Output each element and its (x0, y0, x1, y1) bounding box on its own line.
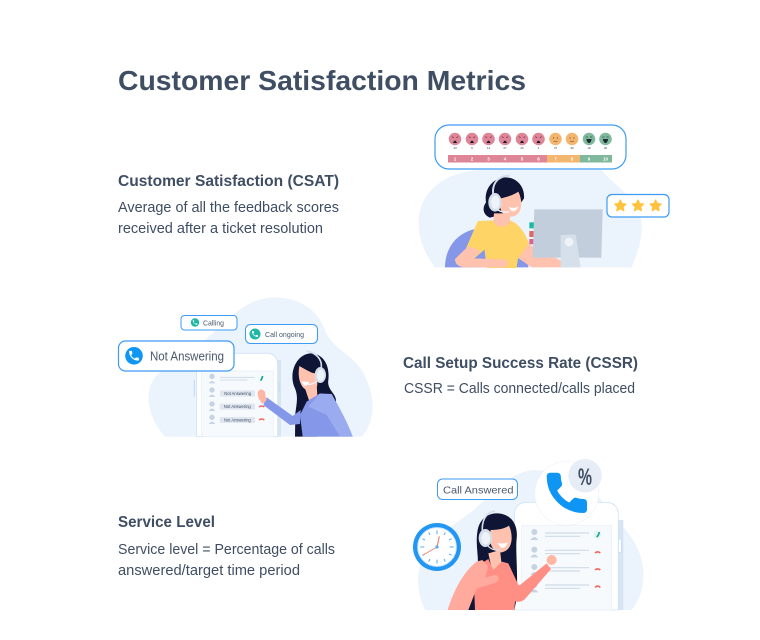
neck (493, 213, 510, 227)
neck (488, 550, 502, 572)
bubble: Call Answered (438, 479, 518, 500)
background blob (419, 170, 642, 267)
bubble: Call Answered: Call Answered (443, 484, 514, 496)
bubble: Call ongoing (246, 324, 318, 344)
score bar: 9 (588, 156, 591, 162)
clock (413, 523, 461, 571)
bubble: Calling (181, 316, 237, 330)
rating scale bubble (435, 125, 626, 169)
bubble: Not Answering: Not Answering (150, 350, 224, 364)
text block: Service Level (118, 514, 335, 579)
illustration: CSSR agent with phone (149, 297, 373, 437)
response counts: 30 (604, 146, 607, 150)
headset (307, 351, 326, 384)
response counts: 37 (554, 146, 557, 150)
contact rows (530, 529, 538, 592)
chair (445, 228, 528, 267)
score bar: 2 (471, 156, 474, 162)
phone: Not Answering (224, 417, 251, 422)
phone: Not Answering (224, 404, 251, 409)
body (300, 393, 353, 437)
text block: CSAT (118, 173, 339, 237)
contact rows (209, 374, 215, 424)
heading: CSSR: Call Setup Success Rate (CSSR) (403, 355, 638, 372)
text block: CSSR (403, 355, 638, 397)
body (473, 559, 520, 610)
raised arm (512, 563, 551, 602)
colored tabs (529, 222, 535, 244)
right arm (516, 243, 562, 267)
bubble: Calling: Calling (203, 318, 224, 328)
bubble: Call ongoing: Call ongoing (265, 330, 304, 339)
response counts: 20 (520, 146, 524, 150)
heading: CSAT: Customer Satisfaction (CSAT) (118, 173, 339, 190)
phone (514, 502, 623, 610)
illustration: CSAT agent at computer (419, 170, 642, 267)
heading: Service Level: Service Level (118, 514, 215, 531)
monitor (533, 209, 603, 267)
response counts (453, 146, 607, 150)
left arm (448, 560, 499, 610)
score bar: 6 (537, 156, 540, 162)
hair (292, 353, 336, 437)
left arm (455, 246, 508, 267)
star rating bubble (607, 194, 669, 217)
neck (305, 385, 317, 403)
score bar: 1 (454, 156, 457, 162)
phone call circle (534, 461, 599, 526)
phone: Not Answering (224, 391, 252, 396)
description: CSAT line 2: received after a ticket resolution (118, 221, 323, 237)
description: Service Level line 1: Service level = Percentage of calls (118, 542, 335, 558)
shirt (467, 221, 528, 267)
score bar: 4 (504, 156, 507, 162)
hair (484, 177, 524, 218)
illustration: Service Level agent (413, 459, 643, 610)
face (299, 366, 317, 391)
response counts: 9 (471, 146, 473, 150)
face (490, 526, 512, 552)
score bar: 10 (603, 156, 608, 162)
background blob (149, 297, 373, 437)
emoji faces (449, 133, 612, 145)
description: CSAT line 1: Average of all the feedback scores (118, 200, 339, 216)
response counts: 43 (453, 146, 457, 150)
response counts: 14 (487, 146, 490, 150)
percent badge (568, 459, 602, 492)
title: Customer Satisfaction Metrics (118, 65, 526, 96)
response counts: 2 (538, 146, 540, 150)
score bar: 7 (554, 156, 557, 162)
score bar (448, 155, 612, 162)
score bar: 5 (521, 156, 524, 162)
score bar: 3 (487, 156, 490, 162)
description: Service Level line 2: answered/target time period (118, 563, 300, 579)
background blob (418, 470, 643, 610)
hair (467, 513, 517, 610)
raised arm (263, 397, 301, 425)
description: CSSR: CSSR = Calls connected/calls placed (404, 381, 635, 397)
face (500, 192, 521, 217)
response counts: 18 (587, 146, 591, 150)
bubble: Not Answering (118, 341, 234, 371)
response counts: 27 (503, 146, 507, 150)
phone (194, 353, 281, 437)
percent badge: % (578, 464, 592, 491)
headset (488, 176, 510, 212)
headset (479, 511, 500, 550)
score bar: 8 (571, 156, 574, 162)
response counts: 30 (570, 146, 574, 150)
